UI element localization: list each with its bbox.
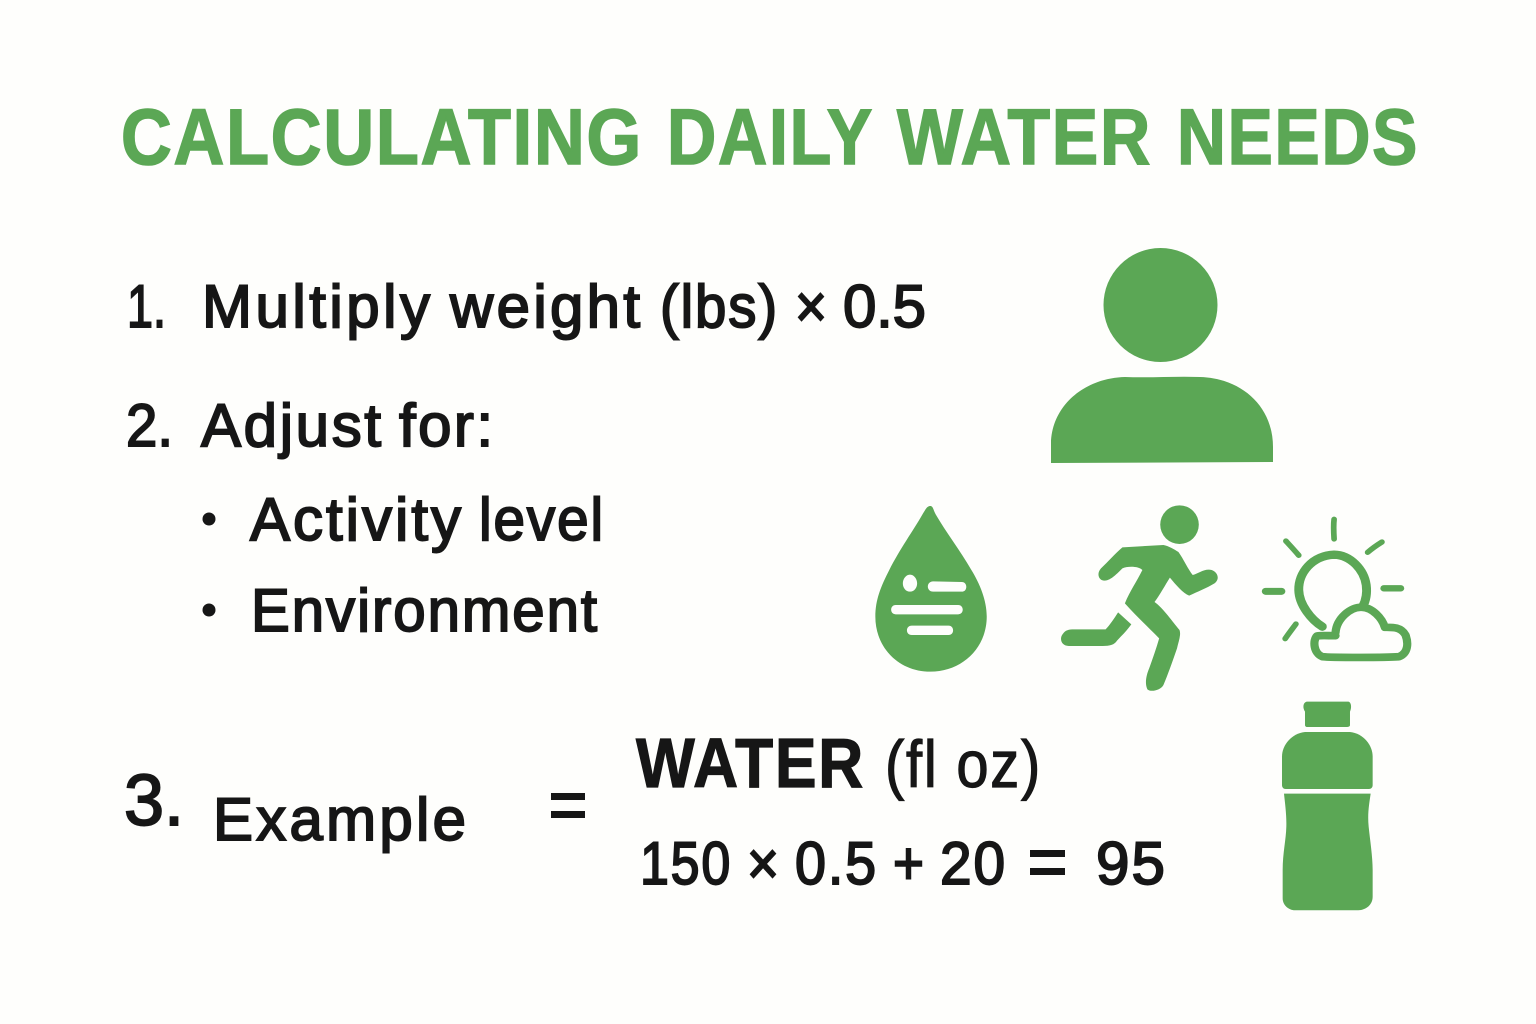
step 3 number: 3. xyxy=(124,761,184,841)
icon: running figure xyxy=(1061,505,1218,691)
title: CALCULATING xyxy=(121,92,643,181)
bullet: activity level: Activity xyxy=(250,486,461,553)
step 1 text: 0.5 xyxy=(843,273,926,340)
formula: 20 xyxy=(940,830,1007,897)
step 1 text: Multiply xyxy=(202,273,430,340)
icon: sun and cloud xyxy=(1266,519,1407,657)
step 1 text xyxy=(127,273,926,340)
step 1 text: × xyxy=(795,273,827,340)
title: NEEDS xyxy=(1177,92,1419,181)
step 1 text: 1. xyxy=(127,273,166,340)
step 2 text: 2. xyxy=(126,392,173,459)
water heading xyxy=(636,724,1042,802)
formula: 0.5 xyxy=(795,830,878,897)
step 2 text: Adjust xyxy=(201,392,381,459)
bullet: environment: Environment xyxy=(251,577,599,644)
water heading: WATER xyxy=(636,724,865,802)
example label: Example xyxy=(213,786,466,853)
icon: water drop xyxy=(875,506,987,672)
step 1 text: (lbs) xyxy=(660,273,779,340)
formula: + xyxy=(893,830,924,897)
step 2 text xyxy=(126,392,493,459)
formula xyxy=(640,830,1167,897)
water heading: (fl oz) xyxy=(885,727,1042,801)
step 2 text: for: xyxy=(399,392,493,459)
formula: 95 xyxy=(1096,830,1167,897)
step 1 text: weight xyxy=(449,273,640,340)
title xyxy=(121,92,1419,181)
bullet: activity level: level xyxy=(479,486,605,553)
bullet: activity level xyxy=(202,486,605,553)
equals sign xyxy=(551,793,585,818)
title: DAILY xyxy=(667,92,874,181)
icon: water bottle xyxy=(1282,702,1373,910)
formula: × xyxy=(747,830,779,897)
icon: person xyxy=(1051,248,1273,463)
title: WATER xyxy=(897,92,1152,181)
formula: 150 xyxy=(640,830,732,897)
